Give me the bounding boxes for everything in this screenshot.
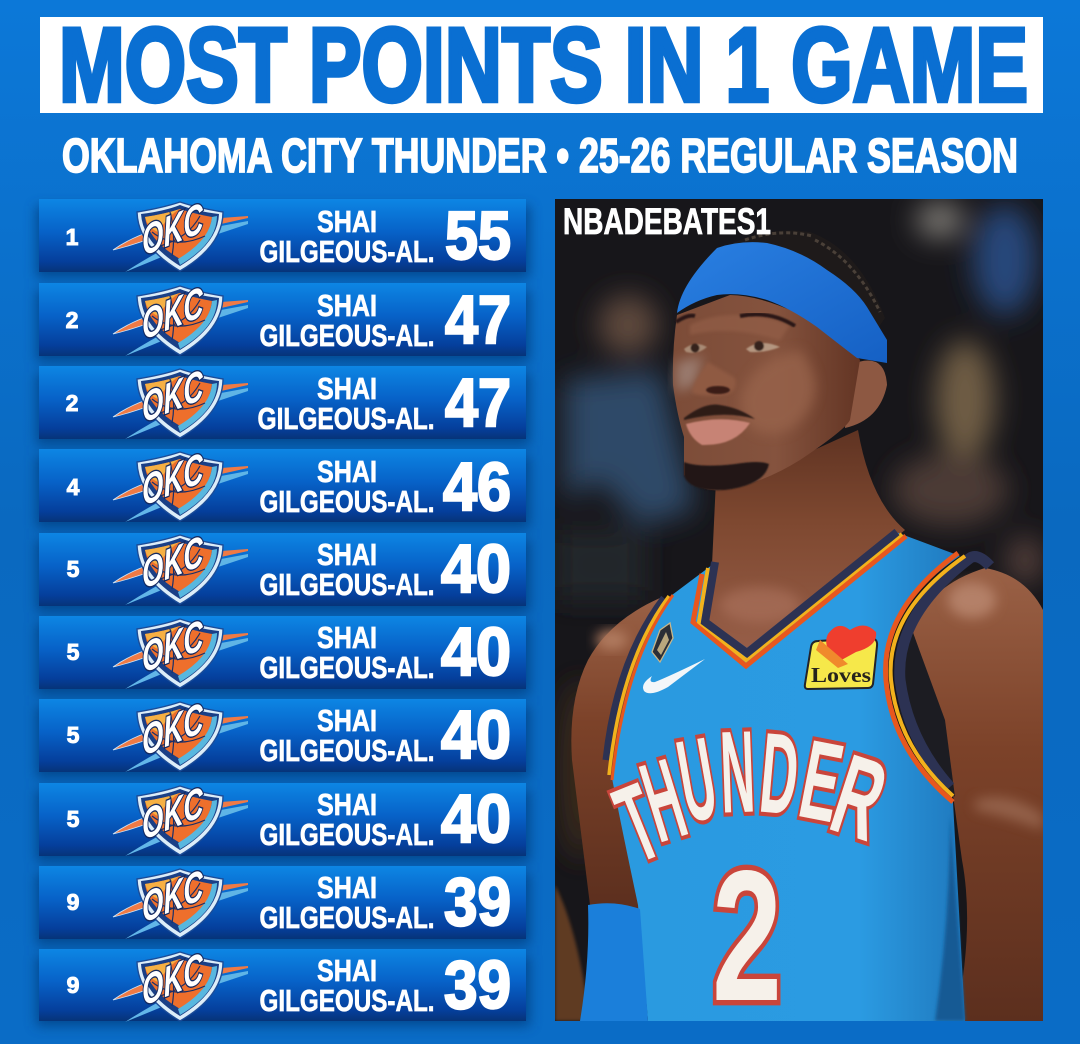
row 8: GILGEOUS-AL.	[260, 817, 434, 852]
row 10: 9	[67, 972, 79, 998]
row 10: 39	[444, 947, 511, 1023]
row 6: GILGEOUS-AL.	[260, 650, 434, 685]
row 6	[39, 610, 526, 690]
row 1	[39, 193, 526, 274]
jersey lettering THUNDER: D	[755, 709, 804, 839]
row 4: 4	[67, 474, 80, 500]
row 5: 5	[67, 556, 80, 582]
row 5: OKC	[140, 526, 206, 598]
row 8: OKC	[140, 777, 206, 849]
face	[673, 295, 860, 490]
eyebrows	[676, 314, 795, 326]
row shadows	[36, 206, 530, 1026]
row 4: SHAI	[317, 454, 377, 489]
row 7: SHAI	[317, 703, 377, 738]
row 4	[39, 443, 526, 525]
row 5: GILGEOUS-AL.	[260, 567, 434, 602]
row 2: GILGEOUS-AL.	[260, 318, 434, 353]
cheek glare	[676, 356, 703, 392]
row 4: GILGEOUS-AL.	[260, 484, 434, 519]
nike swoosh	[643, 659, 705, 693]
jersey lettering THUNDER: R	[818, 731, 900, 866]
row 5	[39, 526, 526, 607]
row 4: 46	[443, 449, 511, 525]
row 10: OKC	[140, 943, 206, 1015]
right armhole trim	[886, 553, 990, 802]
neck and chest	[700, 430, 905, 660]
row 7: 40	[441, 697, 511, 773]
loves patch: Loves	[811, 663, 871, 687]
watermark: NBADEBATES1	[563, 201, 771, 242]
row 8: 5	[67, 806, 80, 832]
row 3: OKC	[140, 360, 206, 432]
player photo panel	[555, 199, 1043, 1040]
forehead highlight	[690, 316, 788, 338]
row 9: OKC	[140, 860, 206, 932]
row 3: 47	[445, 365, 511, 441]
face highlight	[740, 350, 815, 434]
row 10: SHAI	[317, 953, 377, 988]
goatee	[684, 462, 769, 490]
left lower body skin sliver	[555, 886, 586, 1021]
left arm highlight	[596, 630, 628, 650]
row 1: OKC	[140, 193, 206, 265]
left armhole trim	[606, 595, 673, 780]
lips	[686, 419, 750, 445]
row 9: SHAI	[317, 870, 377, 905]
jersey lettering THUNDER: T	[600, 761, 676, 886]
jersey lettering THUNDER: E	[791, 716, 852, 846]
row 2	[39, 277, 526, 358]
row 8: SHAI	[317, 787, 377, 822]
eyes	[684, 341, 780, 353]
row 7: 5	[67, 722, 80, 748]
row 5: 40	[441, 531, 511, 607]
row 9	[39, 860, 526, 940]
mustache	[684, 405, 755, 420]
nose	[692, 362, 736, 396]
row 3: 2	[66, 390, 78, 416]
neck trim	[693, 532, 906, 666]
armhole dark lining	[913, 633, 955, 797]
arm sleeve	[580, 903, 648, 1021]
jersey badge	[652, 623, 673, 662]
jersey lettering THUNDER: N	[718, 707, 757, 837]
ear	[845, 360, 887, 428]
jersey	[612, 531, 965, 1021]
row 5: SHAI	[317, 537, 377, 572]
row 1: SHAI	[317, 204, 377, 239]
row 8: 40	[441, 781, 511, 857]
row 7: GILGEOUS-AL.	[260, 733, 434, 768]
hair braids	[744, 231, 882, 313]
right arm crease highlight	[975, 797, 1043, 830]
row 2: 2	[66, 307, 78, 333]
jersey side shadow	[935, 815, 965, 1021]
row 6: 5	[67, 639, 80, 665]
row 9: 9	[67, 889, 79, 915]
blurred crowd background	[555, 199, 1043, 1021]
row 3: GILGEOUS-AL.	[258, 401, 434, 436]
row 8	[39, 777, 526, 857]
row 7: OKC	[140, 693, 206, 765]
nostril	[706, 386, 730, 394]
row 10: GILGEOUS-AL.	[260, 983, 434, 1018]
loves patch	[805, 625, 877, 689]
left arm	[571, 598, 660, 910]
row 1: 1	[66, 224, 79, 250]
row 6: OKC	[140, 610, 206, 682]
row 9: GILGEOUS-AL.	[260, 900, 434, 935]
shoulder highlight	[948, 582, 996, 618]
row 9: 39	[444, 864, 511, 940]
jersey lettering THUNDER: H	[629, 734, 699, 867]
row 2: 47	[445, 282, 511, 358]
row 6: 40	[441, 614, 511, 690]
row 6: SHAI	[317, 620, 377, 655]
headband	[677, 242, 887, 363]
row 1: GILGEOUS-AL.	[260, 234, 434, 269]
row 3: SHAI	[317, 371, 377, 406]
right arm	[912, 568, 1043, 1021]
jersey lettering THUNDER: U	[669, 713, 725, 846]
jersey lettering THUNDER	[606, 727, 887, 864]
jersey number 2: 2	[712, 831, 782, 1040]
row 2: SHAI	[317, 288, 377, 323]
row 3	[39, 360, 526, 441]
row 1: 55	[445, 198, 511, 274]
row 10	[39, 943, 526, 1023]
leaderboard rows	[39, 193, 526, 1023]
row 2: OKC	[140, 277, 206, 349]
collarbone highlight	[720, 587, 800, 623]
row 4: OKC	[140, 443, 206, 515]
row 7	[39, 693, 526, 773]
